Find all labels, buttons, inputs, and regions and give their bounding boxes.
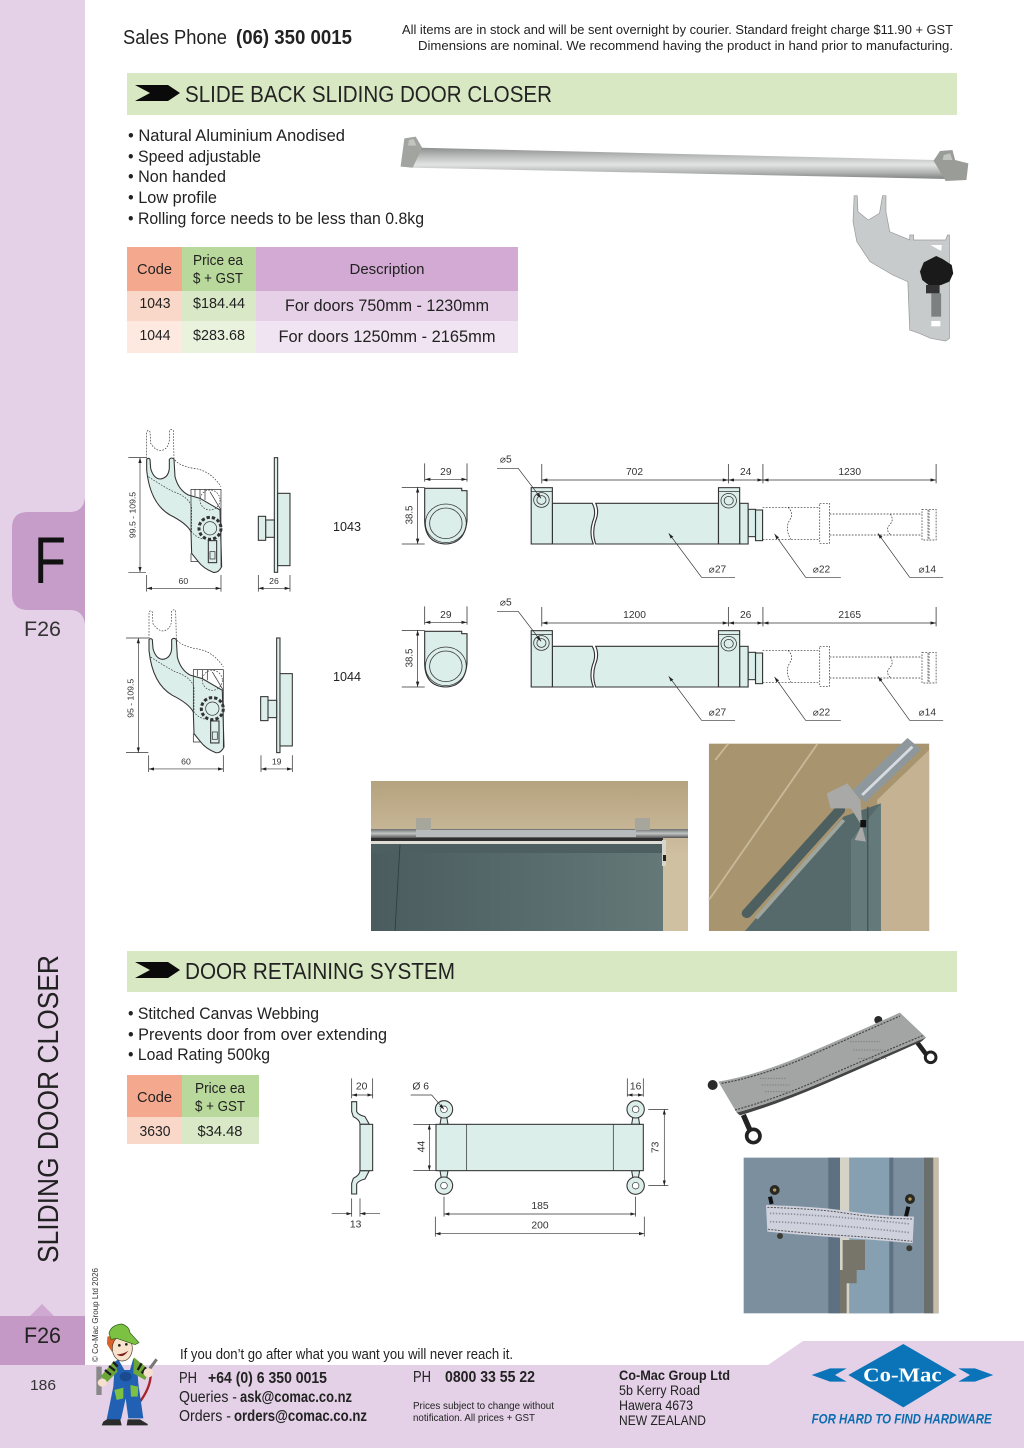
drawing: bracket 1044 bbox=[125, 610, 224, 772]
photo: closer seen from below bbox=[709, 744, 929, 931]
price table 1: For doors 750mm - 1230mm bbox=[285, 296, 489, 315]
price table 1: 1043 bbox=[140, 295, 170, 312]
drawing: retainer side view bbox=[332, 1078, 380, 1230]
drawing: closer 1044: 1200 bbox=[623, 610, 646, 621]
company address: Hawera 4673 bbox=[619, 1397, 693, 1413]
drawing: closer 1044 bbox=[402, 598, 943, 720]
drawing: retainer side view: 20 bbox=[356, 1081, 368, 1092]
photo: aluminium closer rod bbox=[401, 137, 968, 181]
feature list 2: • Prevents door from over extending bbox=[128, 1025, 387, 1044]
feature list 1: • Low profile bbox=[128, 188, 217, 207]
heading: door retaining system bbox=[127, 951, 957, 992]
label 1044: 1044 bbox=[333, 669, 361, 684]
feature list 2: • Load Rating 500kg bbox=[128, 1045, 270, 1064]
drawing: side view 1044 bbox=[261, 638, 292, 772]
page number: 186 bbox=[30, 1377, 56, 1394]
vertical section title: SLIDING DOOR CLOSER bbox=[33, 955, 65, 1263]
price table 2: Code bbox=[137, 1089, 172, 1106]
freephone and price note: notification. All prices + GST bbox=[413, 1413, 535, 1424]
logo: Co-Mac bbox=[812, 1344, 993, 1426]
sales phone bbox=[123, 27, 352, 49]
contact block: phone and emails: ask@comac.co.nz bbox=[240, 1389, 352, 1406]
drawing: side view 1043 bbox=[258, 458, 290, 592]
freephone and price note bbox=[413, 1369, 554, 1424]
drawing: closer 1043: 1230 bbox=[838, 467, 862, 478]
freight notice: All items are in stock and will be sent overnight by courier. Standard freight charge $11.90 + GST bbox=[402, 22, 953, 37]
mascot: handyman character bbox=[98, 1324, 157, 1425]
company address bbox=[619, 1367, 730, 1428]
price table 1: 1044 bbox=[140, 327, 170, 344]
drawing: retainer front view: 73 bbox=[651, 1141, 662, 1153]
freight notice: Dimensions are nominal. We recommend having the product in hand prior to manufacturing. bbox=[418, 38, 953, 53]
price table 1 bbox=[127, 247, 518, 353]
page code top: F26 bbox=[24, 618, 61, 641]
drawing: closer 1043: ⌀14 bbox=[919, 565, 937, 576]
page code block: F26 bbox=[24, 1323, 61, 1348]
company address: NEW ZEALAND bbox=[619, 1412, 706, 1428]
drawing: closer 1044: ⌀27 bbox=[709, 708, 727, 719]
drawing: closer 1043: 702 bbox=[626, 467, 644, 478]
drawing: retainer side view: 13 bbox=[350, 1219, 362, 1230]
company address: Co-Mac Group Ltd bbox=[619, 1367, 730, 1383]
photo: webbing strap bbox=[708, 1013, 936, 1143]
tagline: If you don’t go after what you want you will never reach it. bbox=[180, 1347, 513, 1363]
drawing: bracket 1043: 60 bbox=[179, 576, 188, 586]
drawing: closer 1043: ⌀22 bbox=[813, 565, 831, 576]
freephone and price note: Prices subject to change without bbox=[413, 1401, 554, 1412]
feature list 1: • Rolling force needs to be less than 0.8kg bbox=[128, 209, 424, 228]
feature list 2: • Stitched Canvas Webbing bbox=[128, 1004, 319, 1023]
freight notice bbox=[402, 22, 953, 53]
price table 2 bbox=[127, 1075, 259, 1144]
drawing: bracket 1043 bbox=[128, 429, 222, 592]
price table 1: Code bbox=[137, 261, 172, 278]
drawing: retainer front view: 185 bbox=[531, 1201, 549, 1212]
feature list 1 bbox=[128, 126, 424, 228]
side band bbox=[0, 0, 85, 1448]
logo: Co-Mac: Co-Mac bbox=[863, 1365, 942, 1387]
drawing: bracket 1044: 95 - 109.5 bbox=[125, 679, 135, 718]
price table 1: For doors 1250mm - 2165mm bbox=[278, 327, 496, 346]
drawing: retainer front view bbox=[411, 1078, 668, 1237]
sales phone: (06) 350 0015 bbox=[236, 27, 352, 49]
feature list 1: • Non handed bbox=[128, 167, 226, 186]
drawing: retainer front view: 16 bbox=[630, 1081, 642, 1092]
drawing: closer 1043: 38.5 bbox=[404, 505, 415, 524]
drawing: closer 1044: 2165 bbox=[838, 610, 862, 621]
drawing: closer 1043: 24 bbox=[740, 467, 752, 478]
contact block: phone and emails: PH bbox=[179, 1370, 197, 1387]
label 1043: 1043 bbox=[333, 519, 361, 534]
sales phone: Sales Phone bbox=[123, 27, 227, 49]
drawing: bracket 1043: 99.5 - 109.5 bbox=[128, 492, 138, 538]
drawing: bracket 1044: 60 bbox=[181, 757, 191, 767]
freephone and price note: 0800 33 55 22 bbox=[445, 1369, 535, 1386]
drawing: retainer front view: 44 bbox=[416, 1141, 427, 1152]
drawing: closer 1044: ⌀22 bbox=[813, 708, 831, 719]
feature list 1: • Speed adjustable bbox=[128, 147, 261, 166]
price table 1: Description bbox=[350, 261, 424, 278]
drawing: retainer front view: Ø 6 bbox=[412, 1081, 429, 1092]
price table 1: $283.68 bbox=[193, 327, 245, 344]
price table 2: 3630 bbox=[140, 1123, 170, 1140]
feature list 1: • Natural Aluminium Anodised bbox=[128, 126, 345, 145]
drawing: closer 1043: 29 bbox=[440, 467, 452, 478]
drawing: closer 1044: 26 bbox=[740, 610, 752, 621]
price table 1: $184.44 bbox=[193, 295, 245, 312]
heading: door retaining system: DOOR RETAINING SYSTEM bbox=[185, 958, 455, 984]
feature list 2 bbox=[128, 1004, 387, 1064]
contact block: phone and emails bbox=[179, 1370, 367, 1425]
section letter tab bbox=[12, 498, 85, 624]
photo: closer installed above door bbox=[371, 781, 688, 931]
drawing: side view 1043: 26 bbox=[269, 576, 279, 586]
drawing: closer 1043 bbox=[402, 455, 943, 577]
contact block: phone and emails: orders@comac.co.nz bbox=[234, 1408, 367, 1425]
price table 2: $ + GST bbox=[195, 1098, 245, 1115]
contact block: phone and emails: Queries - bbox=[179, 1389, 237, 1406]
price table 2: $34.48 bbox=[198, 1123, 242, 1140]
price table 1: Price ea bbox=[193, 252, 244, 269]
drawing: closer 1043: ⌀5 bbox=[500, 455, 512, 465]
photo: strap fitted on door bbox=[744, 1158, 939, 1313]
footer strip bbox=[0, 1341, 1024, 1448]
photo: adjustable bracket with knob bbox=[853, 196, 953, 341]
drawing: closer 1044: ⌀14 bbox=[919, 708, 937, 719]
drawing: side view 1044: 19 bbox=[272, 757, 282, 767]
heading: slide back sliding door closer: SLIDE BACK SLIDING DOOR CLOSER bbox=[185, 81, 552, 107]
section letter tab: F bbox=[34, 523, 66, 597]
contact block: phone and emails: Orders - bbox=[179, 1408, 231, 1425]
drawing: closer 1044: 29 bbox=[440, 610, 452, 621]
company address: 5b Kerry Road bbox=[619, 1382, 700, 1398]
drawing: closer 1044: 38.5 bbox=[404, 648, 415, 667]
price table 1: $ + GST bbox=[193, 270, 243, 287]
copyright: © Co-Mac Group Ltd 2026 bbox=[90, 1268, 100, 1362]
page code block bbox=[0, 1304, 85, 1365]
heading: slide back sliding door closer bbox=[127, 73, 957, 115]
drawing: closer 1044: ⌀5 bbox=[500, 598, 512, 608]
price table 2: Price ea bbox=[195, 1080, 246, 1097]
freephone and price note: PH bbox=[413, 1369, 431, 1386]
contact block: phone and emails: +64 (0) 6 350 0015 bbox=[208, 1370, 327, 1387]
drawing: closer 1043: ⌀27 bbox=[709, 565, 727, 576]
drawing: retainer front view: 200 bbox=[531, 1220, 549, 1231]
